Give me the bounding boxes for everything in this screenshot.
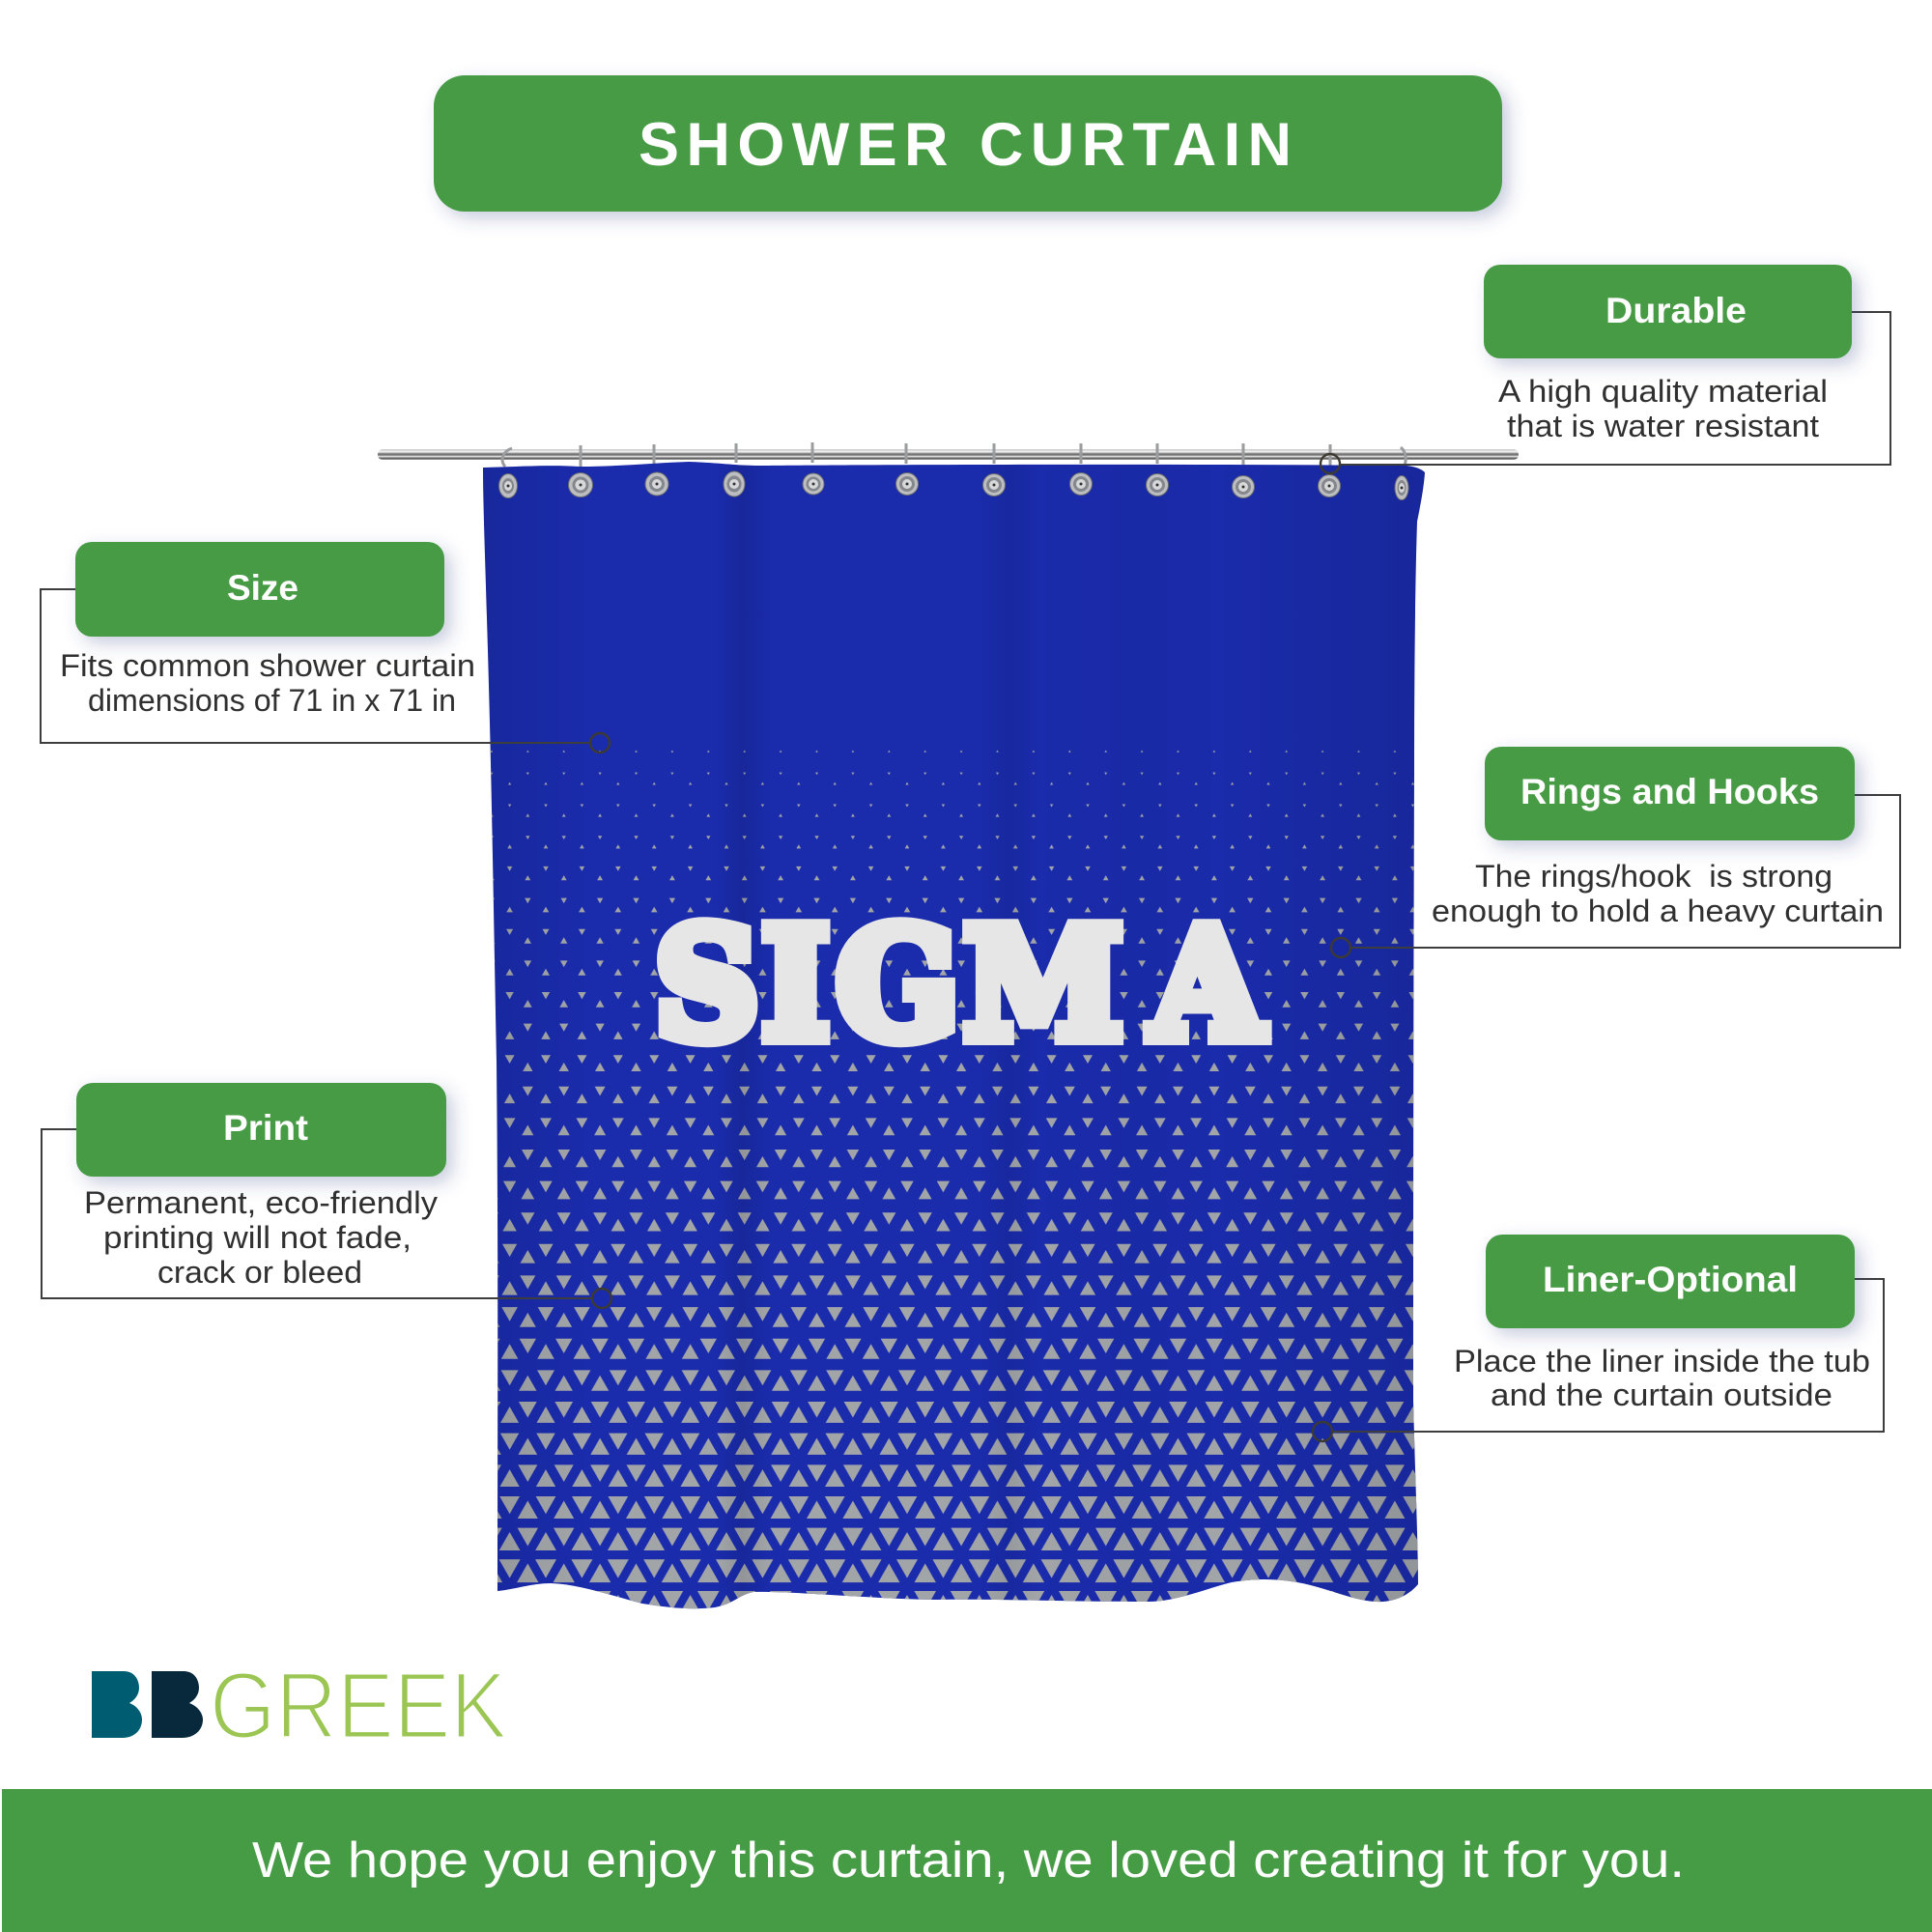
shower curtain (473, 454, 1430, 1623)
label box (1485, 747, 1855, 840)
label: Print (223, 1108, 308, 1148)
connector (41, 589, 590, 743)
description: The rings/hook is strong (1475, 859, 1833, 894)
curtain fabric (473, 454, 1430, 1623)
title banner: SHOWER CURTAIN (639, 111, 1292, 179)
label box (1486, 1235, 1855, 1328)
logo mark: second B (152, 1671, 203, 1738)
label: Liner-Optional (1543, 1260, 1798, 1299)
description: and the curtain outside (1491, 1378, 1833, 1412)
description: enough to hold a heavy curtain (1432, 894, 1884, 928)
callout: Durable (1321, 265, 1890, 473)
label box (1484, 265, 1852, 358)
description: A high quality material (1498, 374, 1828, 409)
curtain lettering: SIGMA: SIGMA (655, 895, 1264, 1072)
description: printing will not fade, (103, 1220, 412, 1255)
description (60, 648, 475, 718)
description (84, 1185, 438, 1290)
connector (1332, 1279, 1884, 1432)
description (1498, 374, 1828, 443)
logo mark: second B: B (157, 1678, 195, 1736)
curtain rod (378, 449, 1519, 460)
callout: Rings and Hooks (1331, 747, 1900, 957)
logo wordmark: GREEK (210, 1653, 507, 1758)
logo mark: first B: B (98, 1678, 135, 1736)
connector (1350, 795, 1900, 948)
connector (42, 1129, 592, 1298)
marker (1331, 938, 1350, 957)
footer banner: We hope you enjoy this curtain, we loved creating it for you. (252, 1833, 1685, 1889)
grommets (498, 471, 1408, 500)
label: Durable (1605, 291, 1747, 330)
footer banner (2, 1789, 1932, 1932)
description (1432, 859, 1884, 928)
triangle halftone pattern (473, 734, 1430, 1623)
title banner (434, 75, 1502, 212)
connector (1341, 312, 1890, 465)
curtain folds shading (473, 454, 1430, 1623)
callout: Size (41, 542, 610, 753)
marker (1321, 454, 1340, 473)
label box (76, 1083, 446, 1177)
description: that is water resistant (1507, 409, 1819, 443)
label: Rings and Hooks (1520, 772, 1819, 811)
marker (1313, 1422, 1332, 1441)
marker (592, 1289, 611, 1308)
description: dimensions of 71 in x 71 in (88, 683, 456, 718)
description: Permanent, eco-friendly (84, 1185, 438, 1220)
marker (590, 733, 610, 753)
description: Fits common shower curtain (60, 648, 475, 683)
logo mark: first B (92, 1671, 142, 1738)
callout: Print (42, 1083, 611, 1308)
callout: Liner-Optional (1313, 1235, 1884, 1441)
logo: BB Greek (92, 1653, 507, 1758)
label box (75, 542, 444, 637)
description (1454, 1344, 1870, 1412)
curtain hooks (502, 442, 1406, 467)
description: Place the liner inside the tub (1454, 1344, 1870, 1378)
label: Size (227, 568, 298, 608)
description: crack or bleed (157, 1255, 362, 1290)
